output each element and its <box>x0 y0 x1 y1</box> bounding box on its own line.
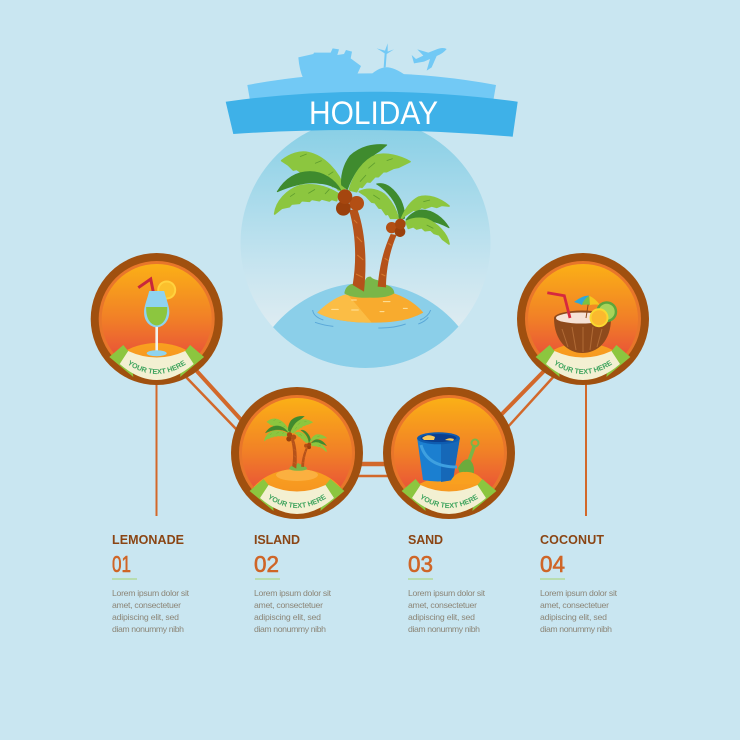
connector lines <box>156 368 586 516</box>
column: island <box>254 533 332 634</box>
hill <box>420 480 478 492</box>
banner: front ribbon with title <box>226 92 518 137</box>
ship and hill <box>298 48 408 79</box>
column: coconut: COCONUT <box>540 533 604 547</box>
banner: back layer with silhouettes <box>247 43 496 110</box>
icon: coconut drink <box>547 293 617 353</box>
ripples <box>313 310 431 328</box>
grass <box>344 277 394 298</box>
sky circle <box>240 118 490 368</box>
ribbon: YOUR TEXT HERE <box>555 360 612 374</box>
icon: bucket <box>417 432 460 482</box>
hill <box>554 346 612 358</box>
hill <box>254 470 340 492</box>
ring <box>231 387 363 519</box>
sand pile <box>449 472 486 484</box>
column: island: diam nonummy nibh <box>254 624 326 634</box>
column: island: amet, consectetuer <box>254 600 323 610</box>
column: coconut: adipiscing elit, sed <box>540 612 607 622</box>
column: sand <box>408 533 486 634</box>
ribbon <box>250 479 344 514</box>
ribbon: YOUR TEXT HERE <box>269 494 326 508</box>
column: coconut: 04 <box>540 551 565 577</box>
column: sand: SAND <box>408 533 443 547</box>
coconuts <box>336 189 406 237</box>
column: coconut <box>540 533 618 634</box>
ribbon: YOUR TEXT HERE <box>128 360 186 374</box>
column: sand: adipiscing elit, sed <box>408 612 475 622</box>
trunks <box>349 209 397 292</box>
column: sand: amet, consectetuer <box>408 600 477 610</box>
title: HOLIDAY <box>309 95 438 131</box>
water <box>273 284 458 368</box>
fronds <box>275 145 449 244</box>
ribbon <box>402 479 496 514</box>
island illustration <box>275 145 449 328</box>
icon: palm trees <box>264 416 327 471</box>
column: coconut: Lorem ipsum dolor sit <box>540 588 618 598</box>
medallion: island <box>231 387 363 519</box>
column: lemonade <box>112 533 190 634</box>
column: island: ISLAND <box>254 533 300 547</box>
column: sand: diam nonummy nibh <box>408 624 480 634</box>
island sand <box>317 290 423 323</box>
column: lemonade: LEMONADE <box>112 533 184 547</box>
medallion: coconut <box>517 253 649 385</box>
column: island: 02 <box>254 551 279 577</box>
ring <box>91 253 223 385</box>
ring <box>383 387 515 519</box>
column: sand: Lorem ipsum dolor sit <box>408 588 486 598</box>
column: island: Lorem ipsum dolor sit <box>254 588 332 598</box>
ring <box>517 253 649 385</box>
column: sand: 03 <box>408 551 433 577</box>
column: lemonade: 01 <box>112 551 131 577</box>
column: lemonade: amet, consectetuer <box>112 600 181 610</box>
wind tree <box>377 43 394 67</box>
hill <box>128 343 186 358</box>
column: island: adipiscing elit, sed <box>254 612 321 622</box>
column: coconut: amet, consectetuer <box>540 600 609 610</box>
column: lemonade: adipiscing elit, sed <box>112 612 179 622</box>
ribbon: YOUR TEXT HERE <box>421 494 478 508</box>
palm trees <box>275 145 449 292</box>
medallion: lemonade <box>90 253 223 385</box>
column: lemonade: Lorem ipsum dolor sit <box>112 588 190 598</box>
medallion: sand <box>383 387 515 519</box>
column: lemonade: diam nonummy nibh <box>112 624 184 634</box>
icon: cocktail glass <box>138 279 176 356</box>
ribbon <box>536 345 630 380</box>
airplane <box>412 48 447 71</box>
sand patch <box>276 469 318 481</box>
column: coconut: diam nonummy nibh <box>540 624 612 634</box>
icon: shovel <box>458 440 478 477</box>
central island scene <box>240 130 490 368</box>
back band <box>247 73 496 110</box>
ribbon <box>110 345 204 380</box>
